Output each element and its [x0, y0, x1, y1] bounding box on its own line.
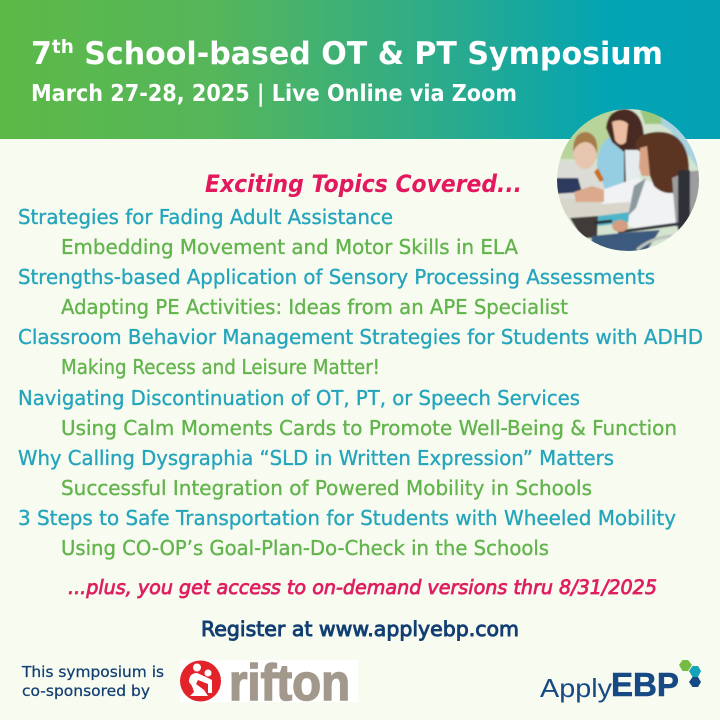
title: 7 — [31, 36, 53, 72]
logo: ApplyEBP — [540, 660, 701, 703]
date and format: March 27-28, 2025 | Live Online via Zoom — [31, 81, 517, 107]
topic 1: Strategies for Fading Adult Assistance — [18, 205, 393, 229]
topic 10: Successful Integration of Powered Mobility in Schools — [61, 476, 592, 500]
logo: ApplyEBP: EBP — [611, 666, 679, 703]
photo: teacher and students in classroom — [555, 107, 701, 253]
topic 7: Navigating Discontinuation of OT, PT, or Speech Services — [18, 386, 580, 410]
header banner — [0, 0, 720, 139]
topic 2: Embedding Movement and Motor Skills in ELA — [61, 235, 518, 259]
logo: ApplyEBP: Apply — [540, 673, 612, 703]
registration line: Register at www.applyebp.com — [201, 617, 519, 641]
topic 9: Why Calling Dysgraphia “SLD in Written Expression” Matters — [18, 446, 614, 470]
topic 12: Using CO-OP’s Goal-Plan-Do-Check in the Schools — [61, 536, 549, 560]
sponsor note: co-sponsored by — [22, 682, 150, 700]
topic list — [18, 205, 703, 560]
topic 4: Adapting PE Activities: Ideas from an APE Specialist — [61, 295, 568, 319]
topic 5: Classroom Behavior Management Strategies for Students with ADHD — [18, 325, 703, 349]
heading: exciting topics: Exciting Topics Covered... — [205, 170, 522, 198]
topic 3: Strengths-based Application of Sensory Processing Assessments — [18, 265, 655, 289]
topic 11: 3 Steps to Safe Transportation for Students with Wheeled Mobility — [18, 506, 676, 530]
on-demand note: ...plus, you get access to on-demand versions thru 8/31/2025 — [68, 576, 657, 599]
logo: rifton: rifton — [229, 654, 350, 711]
sponsor note: This symposium is — [21, 663, 164, 681]
sponsor note — [21, 663, 164, 700]
topic 6: Making Recess and Leisure Matter! — [61, 355, 380, 379]
topic 8: Using Calm Moments Cards to Promote Well-Being & Function — [61, 416, 677, 440]
title: th — [52, 36, 74, 58]
title: School-based OT & PT Symposium — [74, 36, 663, 72]
